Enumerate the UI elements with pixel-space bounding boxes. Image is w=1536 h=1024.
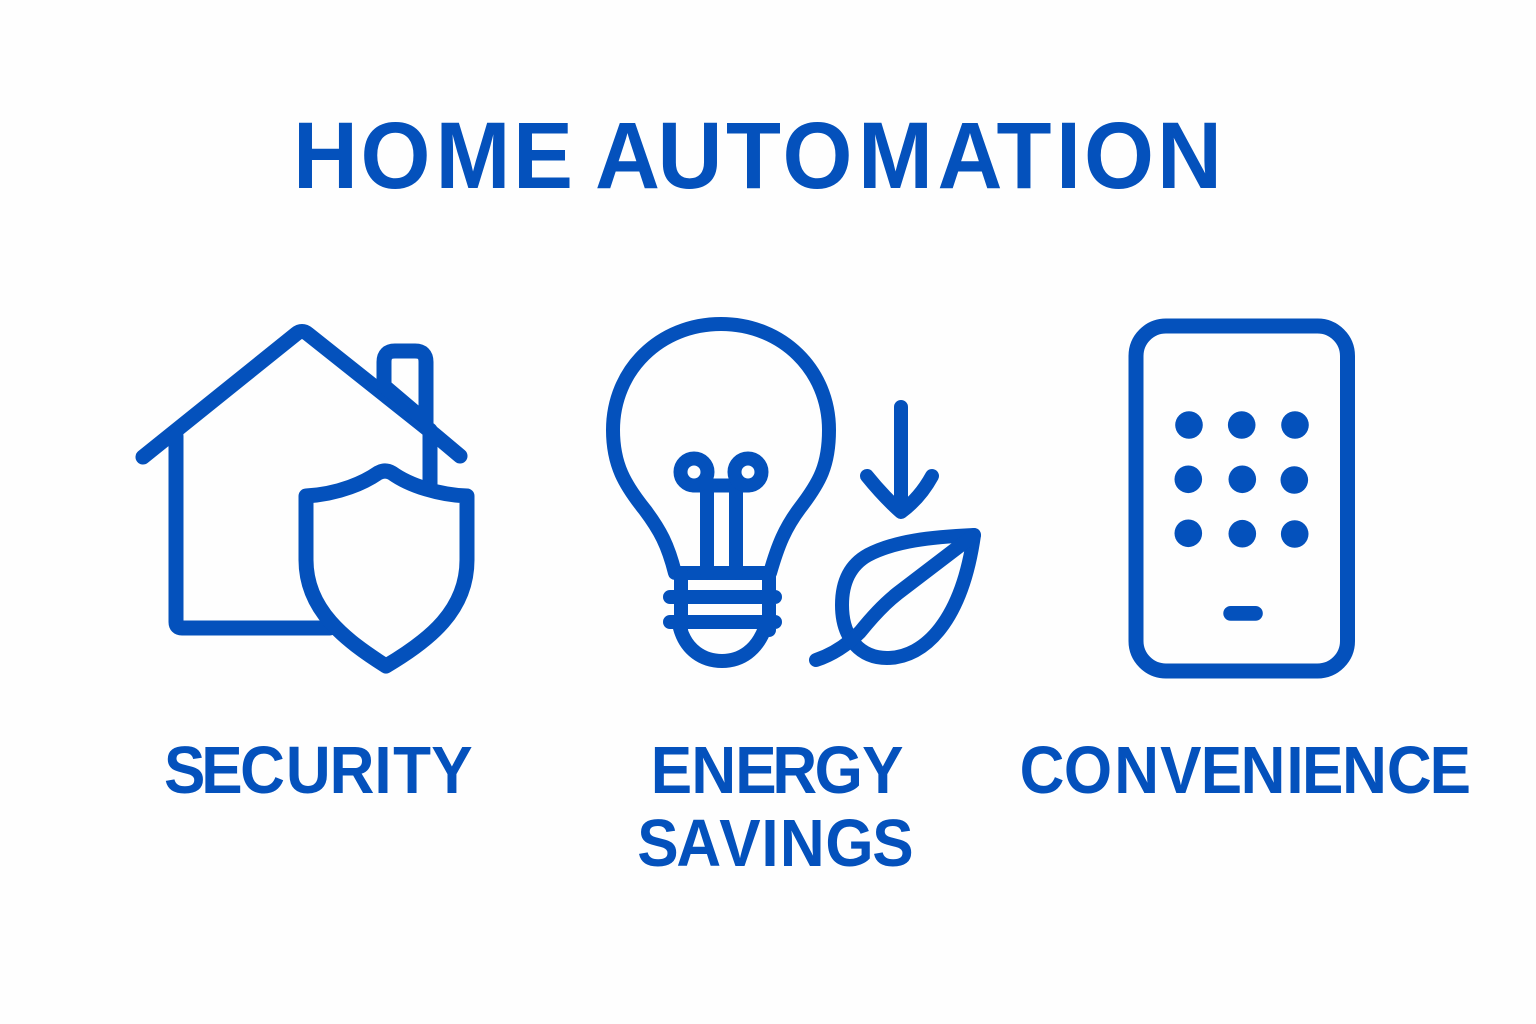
icon: smartphone keypad	[1136, 326, 1348, 671]
label: convenience: CONVENIENCE	[1020, 733, 1471, 807]
bulb glass	[613, 324, 829, 573]
icon: house with shield	[143, 332, 467, 666]
label: energy savings	[637, 733, 914, 880]
phone body	[1136, 326, 1348, 671]
chimney	[384, 351, 430, 485]
title: HOME AUTOMATION	[293, 102, 1222, 208]
label: security: SECURITY	[164, 733, 473, 807]
shield	[306, 471, 467, 666]
filament	[680, 458, 762, 573]
label: energy savings: ENERGY	[651, 733, 903, 807]
leaf vein and stem	[816, 535, 974, 660]
icon: light bulb with down arrow and leaf	[613, 324, 974, 661]
leaf	[842, 535, 974, 658]
down arrow	[867, 407, 932, 512]
keypad dots	[1174, 411, 1309, 621]
bulb screw base	[670, 573, 775, 661]
roof	[143, 332, 460, 457]
label: energy savings: SAVINGS	[637, 806, 914, 880]
house walls	[176, 436, 330, 628]
